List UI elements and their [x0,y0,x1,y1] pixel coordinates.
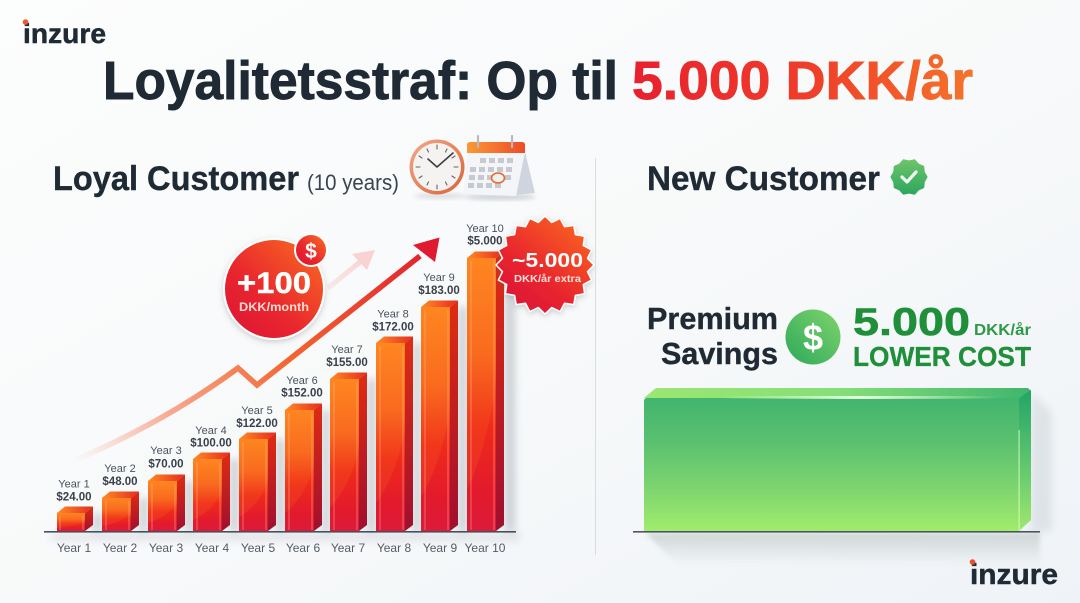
icon: calendar [463,136,536,200]
badge: +100 DKK/month: DKK/month [239,300,309,314]
x axis labels: Year 9 [423,541,457,555]
badge: +100 DKK/month: $ [305,240,317,263]
heading: new customer: New Customer [647,160,880,198]
text: savings amount [853,301,1031,372]
text: savings amount: DKK/år [974,321,1031,339]
bar value labels: Year 1 [58,478,90,490]
bar value labels: Year 4 [195,425,227,437]
bar value labels: Year 5 [241,405,273,417]
bar value labels: Year 8 [377,308,409,320]
arrow: pale secondary [328,250,375,288]
bar value labels: Year 7 [331,344,363,356]
bar value labels: $100.00 [190,438,232,450]
icon: green dollar coin: $ [803,317,823,358]
bar value labels: Year 10 [466,223,504,235]
bar: year 5 [239,432,276,531]
bar: year 3 [148,474,185,531]
divider [595,158,596,555]
shadow: green bar [645,392,1052,565]
heading: loyal customer: (10 years) [307,170,399,195]
badge: +100 DKK/month: +100 [237,267,311,300]
text: savings amount: LOWER COST [853,341,1031,372]
bar: year 4 [193,452,230,531]
x axis labels: Year 8 [377,541,411,555]
bar: year 1 [57,506,93,531]
badge: starburst 5.000 extra [496,216,594,314]
bar value labels: Year 6 [286,375,318,387]
chart: bar shadows [50,262,520,541]
heading: loyal customer: Loyal Customer [53,160,299,198]
badge: starburst 5.000 extra: DKK/år extra [514,273,581,285]
bar value labels: Year 9 [423,272,455,284]
bar: year 9 [421,300,458,531]
icon: clock [410,140,466,199]
x axis labels: Year 4 [195,541,229,555]
bar value labels [56,223,504,504]
bar value labels: $183.00 [418,285,460,297]
bar value labels: $172.00 [372,322,414,334]
chart: new customer green bar [644,388,1031,531]
icon: green dollar coin [786,310,840,364]
chart: loyal customer bars [57,252,504,531]
x axis labels: Year 5 [241,541,275,555]
bar: year 6 [285,404,322,531]
logo: inzure top left: inzure [23,18,106,49]
chart baseline: green bar [633,531,1040,533]
text: premium savings: Premium [647,301,778,336]
bar: year 10 [467,252,504,531]
chart baseline [44,531,516,533]
bar value labels: $155.00 [326,357,368,369]
badge: starburst 5.000 extra: ~5.000 [512,250,583,272]
badge: +100 DKK/month [223,233,328,340]
text: premium savings [647,301,778,371]
bar value labels: Year 3 [150,445,182,457]
bar: year 8 [376,336,413,531]
x axis labels: Year 2 [103,541,137,555]
text: savings amount: 5.000 [853,301,970,344]
x axis labels: Year 7 [331,541,365,555]
text: premium savings: Savings [661,336,778,371]
arrow: faded rising trend [75,238,440,460]
x axis labels: Year 6 [286,541,320,555]
x axis labels: Year 10 [465,541,506,555]
x axis labels: Year 1 [57,541,91,555]
title: Loyalitetsstraf: Op til [103,51,618,111]
bar: year 2 [102,492,139,531]
logo: inzure bottom right: inzure [970,559,1058,591]
icon: green verified badge [892,161,926,193]
bar value labels: $122.00 [236,418,278,430]
bar value labels: $5.000 [467,236,503,248]
bar value labels: $70.00 [148,458,184,470]
bar value labels: $152.00 [281,388,323,400]
bar: year 7 [330,372,367,531]
bar value labels: Year 2 [104,463,136,475]
x axis labels: Year 3 [149,541,183,555]
x axis labels [57,541,506,555]
bar value labels: $48.00 [102,476,138,488]
title: 5.000 DKK/år [632,51,973,111]
title [103,51,973,111]
bar value labels: $24.00 [56,492,92,504]
